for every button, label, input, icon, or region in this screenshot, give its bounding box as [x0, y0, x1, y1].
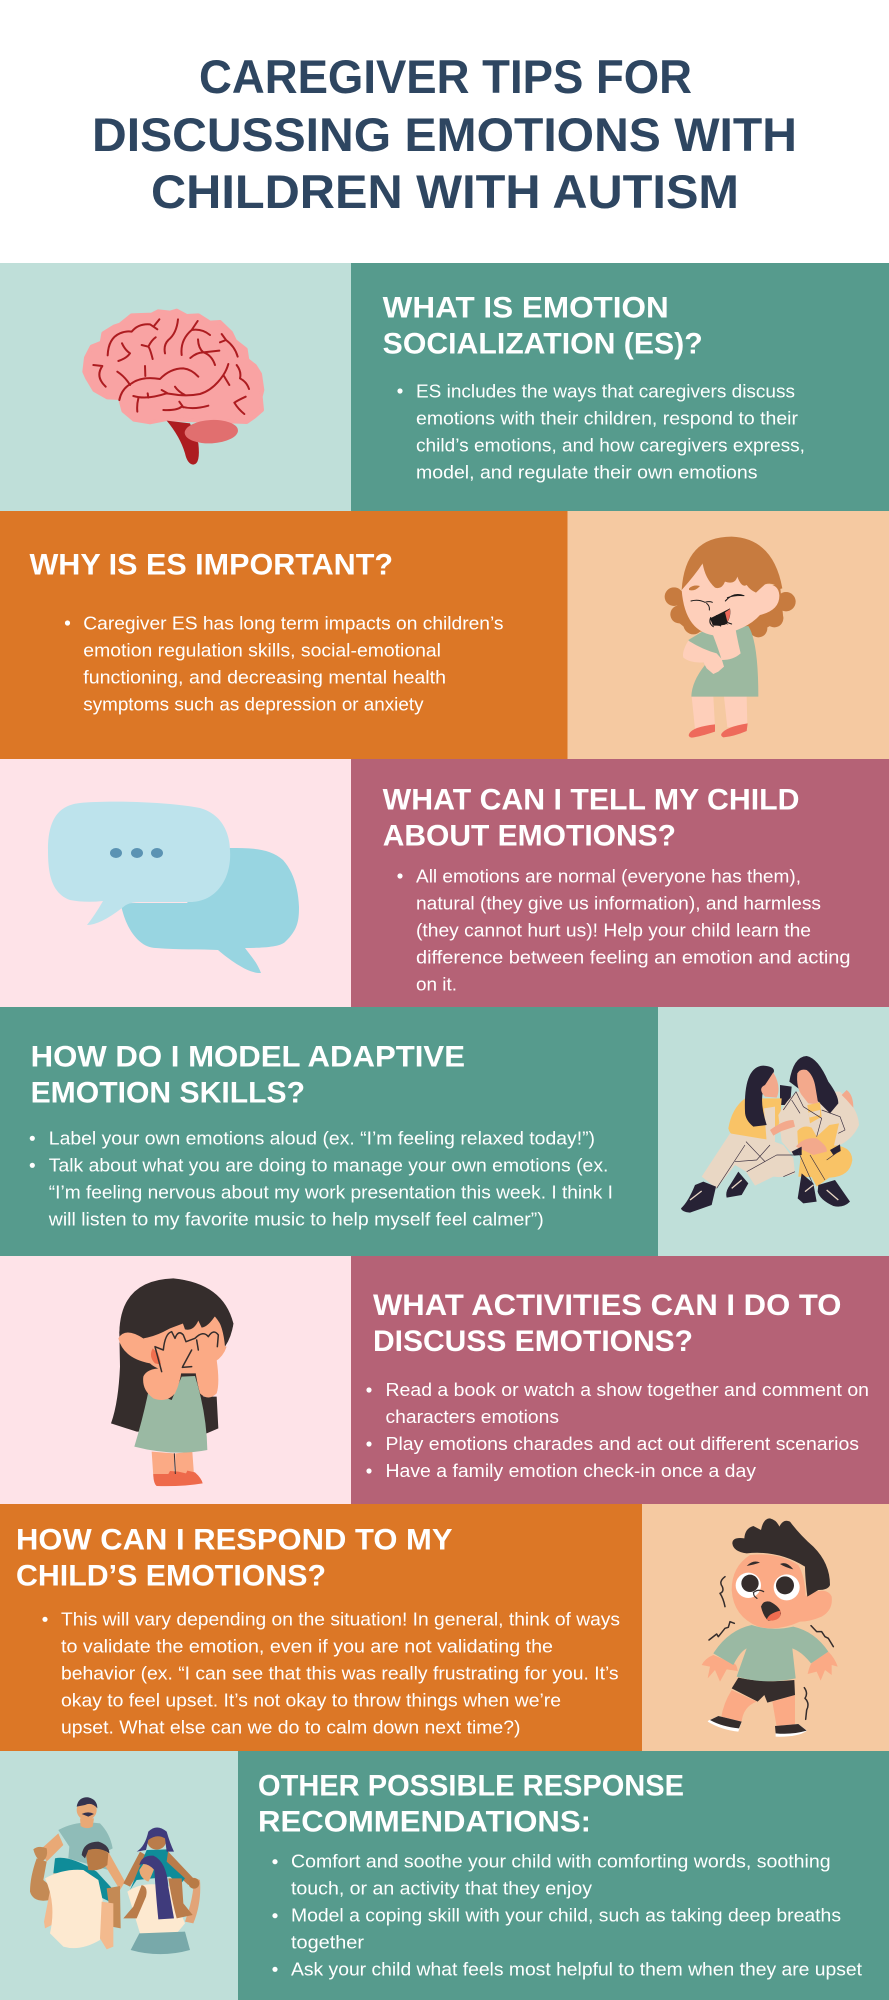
bullet text: Play emotions charades and act out different scenarios — [386, 1433, 859, 1454]
icon: laughing girl — [665, 537, 796, 738]
bullet text — [397, 865, 850, 994]
heading: WHY IS ES IMPORTANT? — [30, 548, 393, 581]
heading — [383, 291, 703, 360]
bullet text: Ask your child what feels most helpful to them when they are upset — [291, 1958, 862, 1979]
title — [92, 50, 797, 218]
heading: DISCUSS EMOTIONS? — [373, 1325, 693, 1358]
icon: startled boy — [702, 1518, 838, 1737]
heading — [16, 1523, 452, 1592]
title: DISCUSSING EMOTIONS WITH — [92, 108, 797, 161]
heading: WHAT CAN I TELL MY CHILD — [383, 783, 800, 816]
heading: CHILD’S EMOTIONS? — [16, 1559, 326, 1592]
heading: HOW DO I MODEL ADAPTIVE — [31, 1041, 465, 1074]
bullet text: on it. — [416, 973, 457, 994]
bullet text: together — [291, 1931, 364, 1952]
bullet text: Read a book or watch a show together and comment on — [386, 1379, 869, 1400]
bullet text: child’s emotions, and how caregivers express, — [416, 434, 805, 455]
bullet text: ES includes the ways that caregivers discuss — [416, 380, 795, 401]
icon: speech bubbles — [48, 802, 299, 973]
panel: why is ES important — [0, 511, 889, 759]
bullet text: behavior (ex. “I can see that this was really frustrating for you. It’s — [61, 1662, 619, 1683]
icon: family — [30, 1797, 200, 1954]
bullet text: Model a coping skill with your child, such as taking deep breaths — [291, 1904, 841, 1925]
title: CHILDREN WITH AUTISM — [151, 165, 739, 218]
bullet text: emotions with their children, respond to their — [416, 407, 798, 428]
bullet text: Comfort and soothe your child with comforting words, soothing — [291, 1850, 831, 1871]
bullet text — [397, 380, 805, 482]
panel: what is emotion socialization — [0, 263, 889, 511]
heading — [373, 1289, 841, 1358]
bullet text: (they cannot hurt us)! Help your child learn the — [416, 919, 811, 940]
panel: how can I respond — [0, 1504, 889, 1751]
bullet text — [65, 612, 504, 714]
heading — [31, 1041, 465, 1110]
panel: how do I model adaptive emotion skills — [0, 1007, 889, 1256]
icon: brain — [84, 311, 262, 465]
bullet text: upset. What else can we do to calm down next time?) — [61, 1716, 520, 1737]
heading: SOCIALIZATION (ES)? — [383, 327, 703, 360]
bullet text: This will vary depending on the situation! In general, think of ways — [61, 1608, 620, 1629]
bullet text — [42, 1608, 620, 1737]
bullet text: natural (they give us information), and harmless — [416, 892, 821, 913]
bullet text: Have a family emotion check-in once a day — [386, 1460, 757, 1481]
title: CAREGIVER TIPS FOR — [199, 50, 692, 103]
heading: WHAT ACTIVITIES CAN I DO TO — [373, 1289, 841, 1322]
icon: girl covering eyes — [111, 1278, 233, 1486]
bullet text: All emotions are normal (everyone has them), — [416, 865, 801, 886]
heading: HOW CAN I RESPOND TO MY — [16, 1523, 452, 1556]
bullet text: Caregiver ES has long term impacts on children’s — [83, 612, 504, 633]
bullet text: “I’m feeling nervous about my work presentation this week. I think I — [49, 1181, 613, 1202]
heading: RECOMMENDATIONS: — [258, 1805, 591, 1838]
icon: two women sitting — [681, 1056, 859, 1213]
panel: other possible response recommendations — [0, 1751, 889, 2000]
bullet text: difference between feeling an emotion and acting — [416, 946, 850, 967]
bullet text: to validate the emotion, even if you are not validating the — [61, 1635, 553, 1656]
bullet text — [272, 1850, 862, 1979]
panel: what can I tell my child — [0, 759, 889, 1007]
bullet text — [30, 1127, 613, 1229]
bullet text: characters emotions — [386, 1406, 559, 1427]
bullet text: symptoms such as depression or anxiety — [83, 693, 424, 714]
bullet text — [366, 1379, 869, 1481]
bullet text: okay to feel upset. It’s not okay to throw things when we’re — [61, 1689, 561, 1710]
bullet text: will listen to my favorite music to help myself feel calmer”) — [48, 1208, 544, 1229]
panel: what activities can I do — [0, 1256, 889, 1504]
bullet text: emotion regulation skills, social-emotional — [83, 639, 441, 660]
bullet text: Talk about what you are doing to manage your own emotions (ex. — [49, 1154, 608, 1175]
heading: ABOUT EMOTIONS? — [383, 819, 676, 852]
bullet text: functioning, and decreasing mental health — [83, 666, 446, 687]
bullet text: model, and regulate their own emotions — [416, 461, 758, 482]
heading — [258, 1769, 684, 1838]
heading — [383, 783, 800, 852]
heading: EMOTION SKILLS? — [31, 1077, 305, 1110]
heading: WHAT IS EMOTION — [383, 291, 669, 324]
heading: OTHER POSSIBLE RESPONSE — [258, 1769, 684, 1802]
bullet text: Label your own emotions aloud (ex. “I’m feeling relaxed today!”) — [49, 1127, 595, 1148]
bullet text: touch, or an activity that they enjoy — [291, 1877, 593, 1898]
